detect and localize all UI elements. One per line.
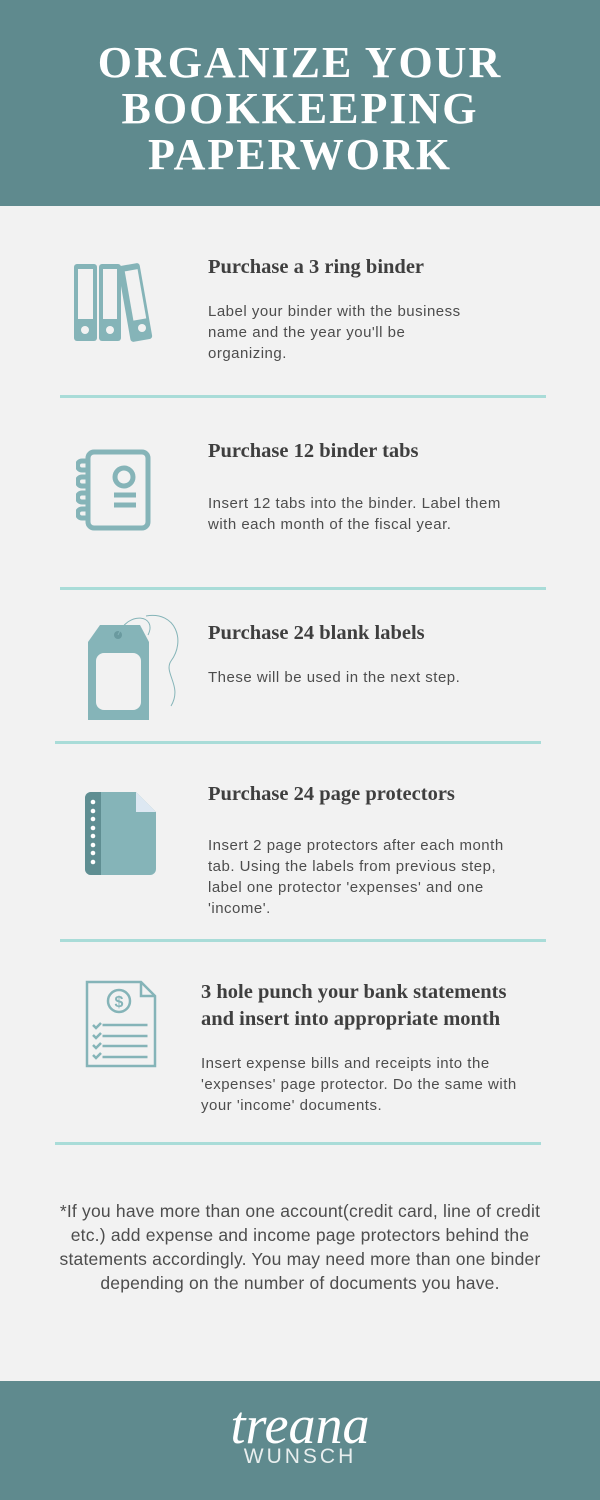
footnote: *If you have more than one account(credit card, line of credit etc.) add expense and income page protectors behind the statements accordingly. You may need more than one binder depending on the number of documents you have. (60, 1201, 540, 1293)
title: PAPERWORK (148, 130, 452, 179)
logo: WUNSCH (244, 1445, 356, 1468)
step 1 text: Label your binder with the business name and the year you'll be organizing. (208, 303, 461, 362)
logo: treana (230, 1395, 369, 1455)
icon: page protector (85, 792, 156, 875)
step 5 text (201, 981, 517, 1114)
step 3 text: These will be used in the next step. (208, 669, 460, 686)
step 1 text: Purchase a 3 ring binder (208, 256, 424, 278)
step 2 text: Purchase 12 binder tabs (208, 440, 419, 462)
icon: tag (88, 614, 178, 720)
step 3 text (208, 622, 460, 686)
step 4 text (208, 783, 504, 917)
icon: binders (74, 263, 152, 342)
header (0, 0, 600, 206)
step 2 text: Insert 12 tabs into the binder. Label them with each month of the fiscal year. (208, 495, 501, 533)
step 1 text (208, 256, 461, 362)
icon: statement (86, 980, 156, 1068)
title: ORGANIZE YOUR (98, 38, 502, 87)
step 3 text: Purchase 24 blank labels (208, 622, 425, 644)
step 2 text (208, 440, 501, 533)
step 4 text: Purchase 24 page protectors (208, 783, 455, 805)
step 5 text: 3 hole punch your bank statements and insert into appropriate month (201, 981, 506, 1030)
icon: notebook (76, 450, 150, 530)
step 5 text: Insert expense bills and receipts into the 'expenses' page protector. Do the same with your 'income' documents. (201, 1055, 517, 1114)
title (98, 38, 502, 179)
step 4 text: Insert 2 page protectors after each month tab. Using the labels from previous step, label one protector 'expenses' and one 'income'. (208, 837, 504, 917)
footer (0, 1381, 600, 1500)
icon: statement: $ (115, 994, 124, 1011)
title: BOOKKEEPING (122, 84, 478, 133)
